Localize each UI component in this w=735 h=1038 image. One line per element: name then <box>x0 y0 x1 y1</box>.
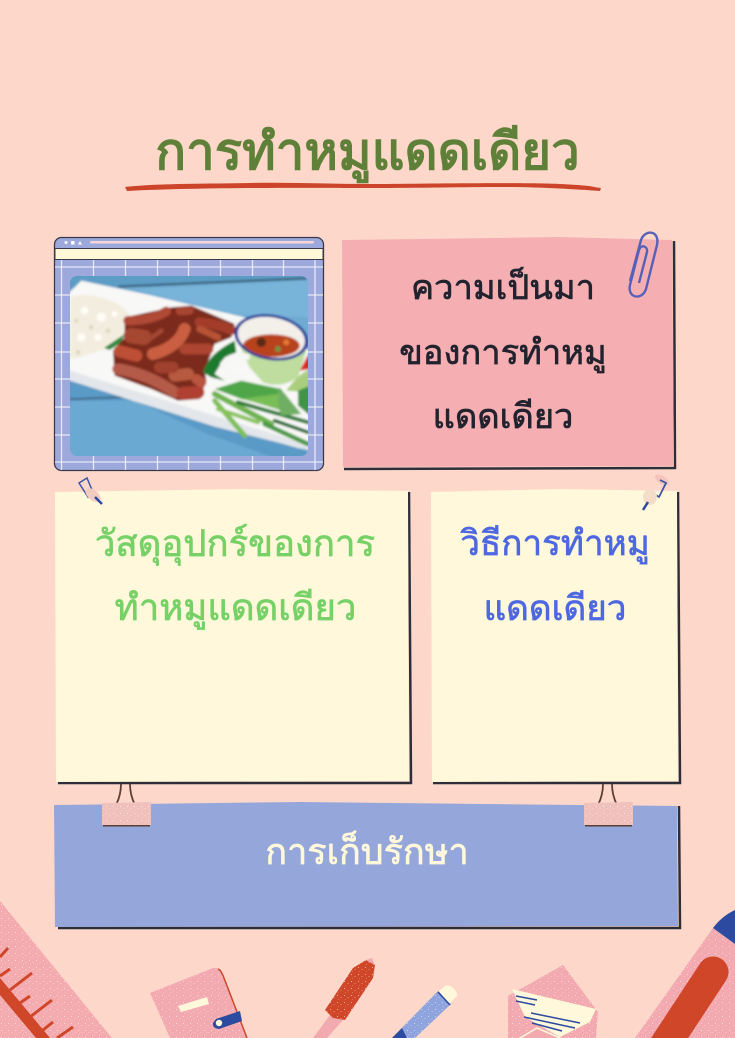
icon: paperclip <box>630 233 657 297</box>
icon: push pin left <box>79 478 103 505</box>
icon: ruler <box>0 901 112 1038</box>
tomato <box>300 351 310 371</box>
icon: blue pen <box>392 985 457 1038</box>
panel: method <box>431 489 680 783</box>
panel: history: ความเป็นมา <box>411 266 595 307</box>
title: การทำหมูแดดเดียว <box>155 123 580 184</box>
panel: materials: วัสดุอุปกร์ของการ <box>95 523 375 566</box>
icon: binder clip left <box>102 784 151 826</box>
panel: history <box>342 237 675 469</box>
icon: push pin right <box>643 472 671 510</box>
image frame: browser window with food photo <box>54 238 324 470</box>
panel: storage <box>54 802 680 928</box>
panel: history: ของการทำหมู <box>399 334 607 373</box>
wood table <box>70 278 308 452</box>
icon: red pen <box>313 958 375 1038</box>
pork <box>113 306 235 401</box>
plate <box>68 281 310 450</box>
panel: method: วิธีการทำหมู <box>460 524 650 564</box>
icon: notebook <box>150 968 247 1038</box>
panel: storage: การเก็บรักษา <box>265 829 469 872</box>
icon: binder clip right <box>584 784 633 826</box>
panel: materials: ทำหมูแดดเดียว <box>115 587 356 630</box>
chili pepper <box>203 341 236 381</box>
panel: history: แดดเดียว <box>433 398 573 436</box>
rice <box>70 295 131 359</box>
icon: marker <box>635 910 735 1038</box>
panel: materials <box>55 489 411 783</box>
cup with dip <box>240 346 307 386</box>
browser title strip <box>55 241 323 260</box>
panel: method: แดดเดียว <box>484 589 626 628</box>
food photo <box>65 271 313 461</box>
cucumber and greens <box>286 369 310 392</box>
icon: envelope <box>508 965 598 1038</box>
